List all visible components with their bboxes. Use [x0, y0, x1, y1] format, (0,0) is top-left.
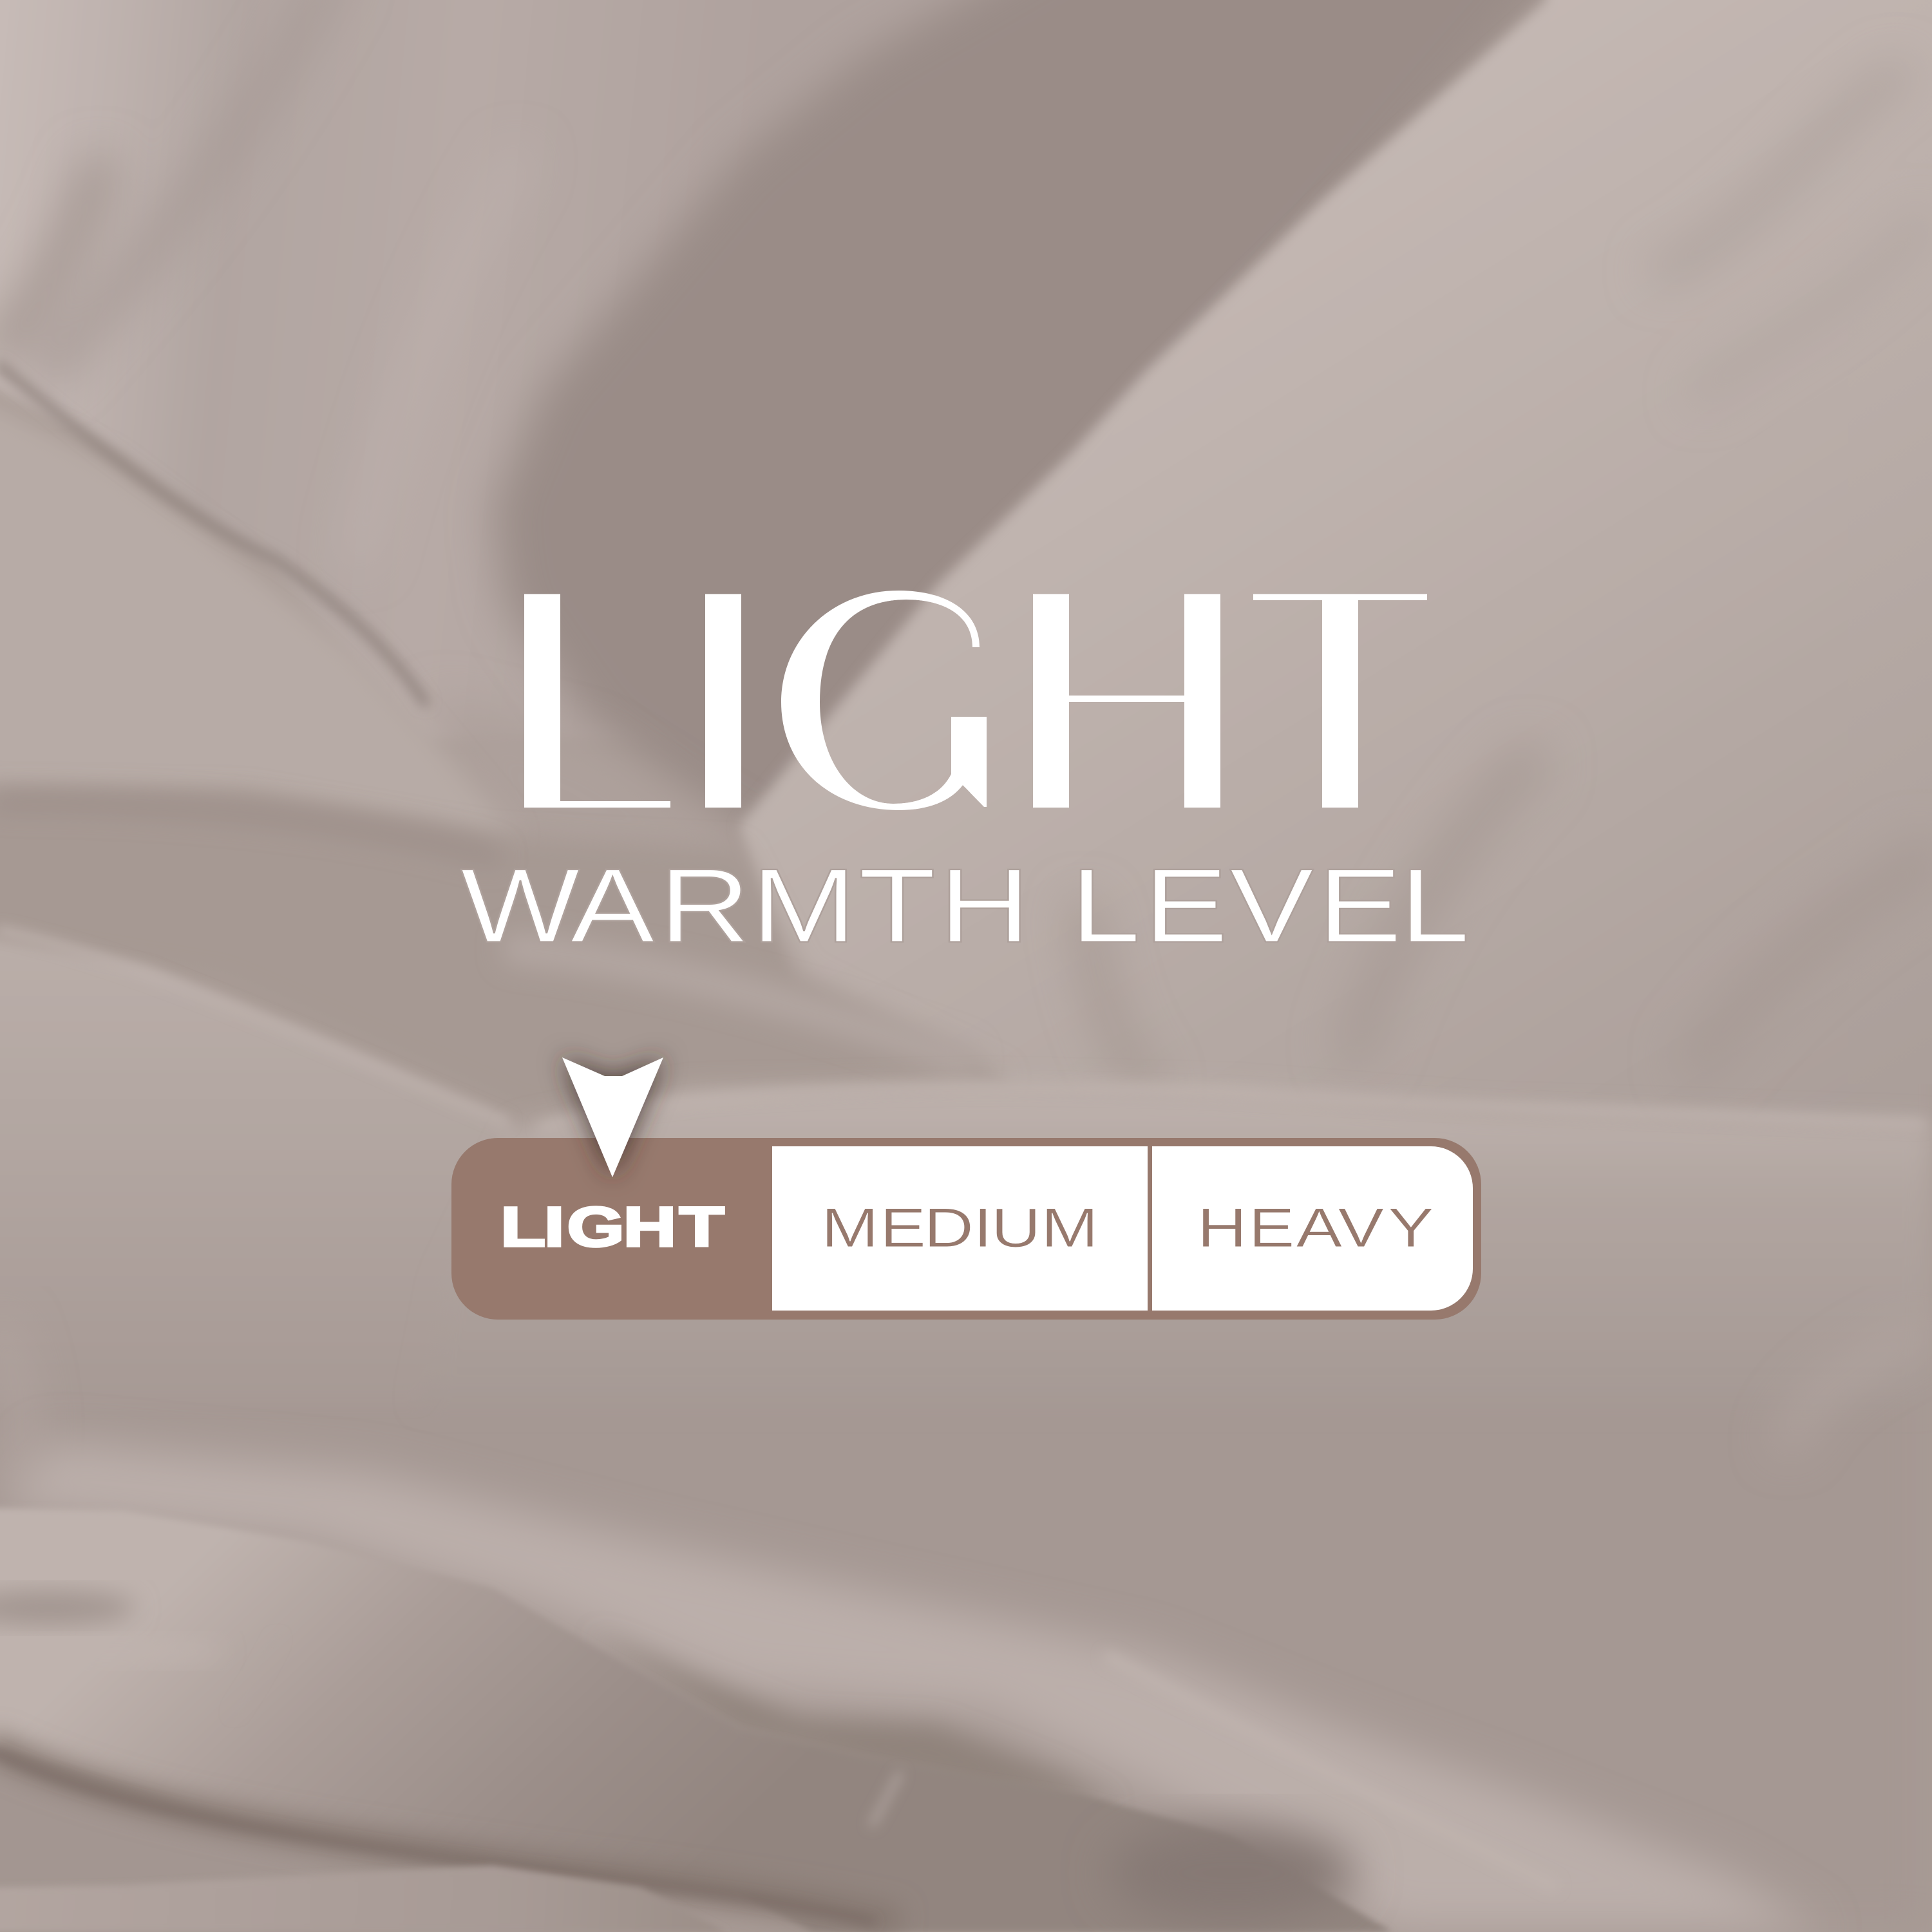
label: HEAVY: HEAVY — [1197, 1197, 1434, 1259]
subtitle: WARMTH LEVEL: WARMTHLEVEL — [460, 848, 1470, 965]
warmth scale bar — [451, 1138, 1481, 1320]
title: LIGHT: L — [502, 527, 691, 874]
title: LIGHT — [524, 591, 1427, 810]
bar frame — [451, 1138, 1481, 1320]
white segments: medium and heavy — [772, 1146, 1473, 1311]
label: MEDIUM: MEDIUM — [821, 1197, 1099, 1259]
title: LIGHT: I — [681, 527, 768, 874]
divider between medium and heavy — [1148, 1146, 1152, 1311]
title: LIGHT: G — [769, 521, 1038, 876]
title: LIGHT: H — [1009, 527, 1244, 873]
title: LIGHT: T — [1245, 527, 1435, 874]
label: LIGHT selected: LIGHT — [500, 1195, 724, 1258]
icon: arrow marker pointing at LIGHT — [562, 1057, 663, 1177]
